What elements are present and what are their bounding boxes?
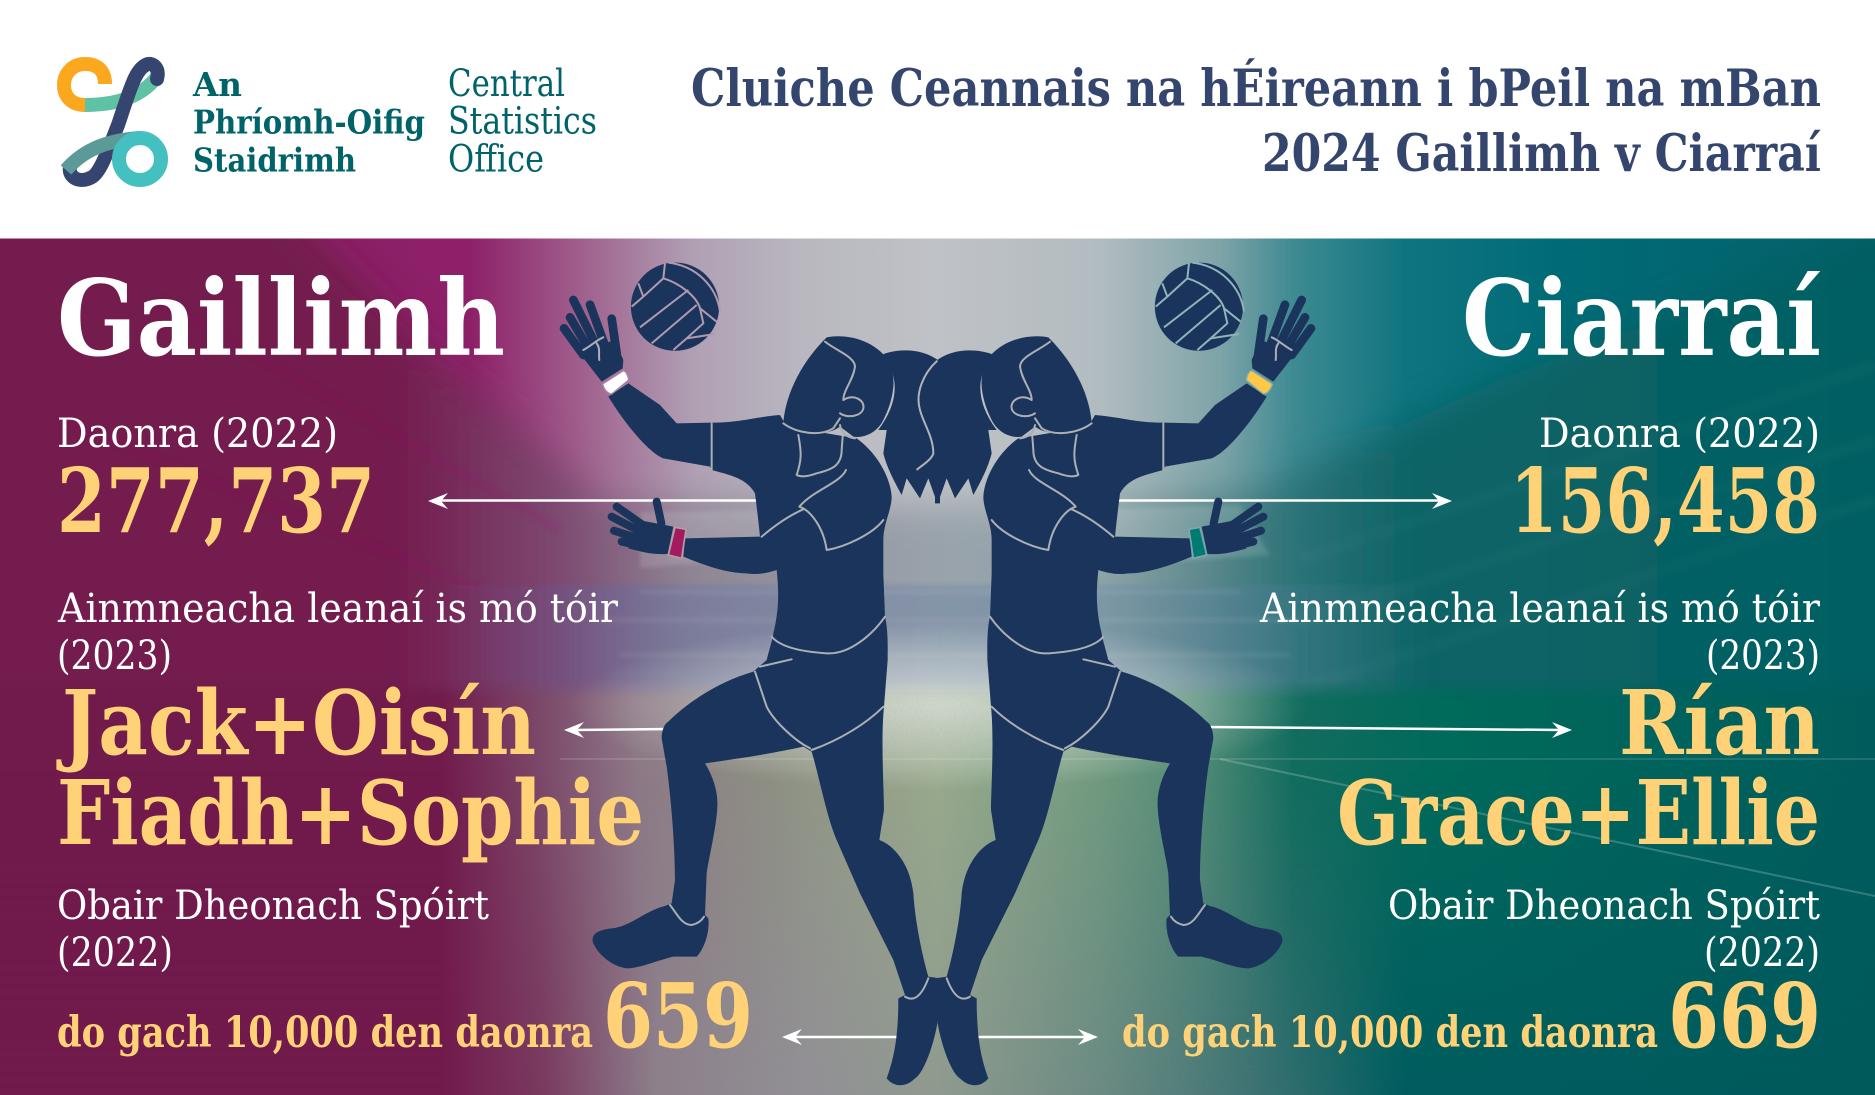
Gaillimh baby names: (2023) [57, 633, 172, 679]
Ciarraí sports volunteering: Obair Dheonach Spóirt [1388, 883, 1820, 929]
Gaillimh baby names: Jack+Oisín [56, 670, 536, 775]
Gaillimh population [57, 411, 375, 553]
Ciarraí baby names: Rían [1619, 670, 1820, 775]
logo text: English [448, 62, 597, 180]
Gaillimh sports volunteering [57, 883, 753, 1068]
Ciarraí sports volunteering: 669 [1668, 963, 1821, 1068]
logo: CSO knot mark [64, 64, 161, 180]
Gaillimh baby names: Fiadh+Sophie [57, 760, 644, 865]
logo text: English: Office [448, 138, 544, 180]
wristband: teal [1189, 527, 1207, 558]
logo text: English: Central [448, 62, 565, 105]
county name: Gaillimh: Gaillimh [57, 256, 505, 380]
ball: Ciarraí [1155, 262, 1244, 351]
logo text: Irish: An [192, 65, 242, 104]
logo text: Irish: Staidrimh [193, 140, 356, 180]
header background [0, 0, 1875, 239]
Ciarraí sports volunteering: do gach 10,000 den daonra [1122, 1008, 1658, 1058]
Gaillimh sports volunteering: do gach 10,000 den daonra [57, 1008, 593, 1058]
Ciarraí baby names: (2023) [1706, 633, 1820, 679]
Gaillimh sports volunteering: Obair Dheonach Spóirt [57, 883, 489, 929]
arrow: Ciarraí population [1115, 493, 1452, 509]
Gaillimh baby names [56, 586, 644, 865]
Ciarraí baby names [1259, 586, 1821, 865]
arrow: Ciarraí names [1206, 722, 1572, 738]
Gaillimh population: Daonra (2022) [57, 411, 338, 457]
player: Gaillimh [564, 262, 940, 1085]
player: Ciarraí (mirrored) [935, 300, 1311, 1085]
Gaillimh baby names: Ainmneacha leanaí is mó tóir [57, 586, 619, 632]
Gaillimh sports volunteering: (2022) [57, 930, 173, 976]
Ciarraí baby names: Ainmneacha leanaí is mó tóir [1259, 586, 1821, 632]
hair seam [917, 361, 937, 470]
Ciarraí population [1510, 411, 1820, 553]
Ciarraí sports volunteering [1122, 883, 1821, 1068]
ball: Gaillimh [631, 262, 720, 351]
arrow: Gaillimh volunteering [782, 1029, 900, 1045]
wristband: maroon [668, 527, 686, 558]
logo text: Irish: Phríomh-Oifig [193, 102, 425, 142]
background: stadium photo with county colour gradients [0, 238, 1875, 1095]
logo text: Irish [192, 65, 425, 180]
arrow: Ciarraí volunteering [978, 1029, 1098, 1045]
wristband: yellow [1246, 371, 1272, 394]
Gaillimh sports volunteering: 659 [603, 963, 753, 1068]
arrow: Gaillimh names [564, 722, 668, 738]
title [691, 59, 1821, 184]
arrow: Gaillimh population [428, 493, 760, 509]
wristband: white [603, 371, 629, 394]
Ciarraí population: Daonra (2022) [1539, 411, 1820, 457]
logo text: English: Statistics [448, 100, 597, 142]
county name: Ciarraí: Ciarraí [1462, 256, 1821, 380]
Ciarraí sports volunteering: (2022) [1704, 930, 1820, 976]
Gaillimh population: 277,737 [57, 448, 375, 553]
